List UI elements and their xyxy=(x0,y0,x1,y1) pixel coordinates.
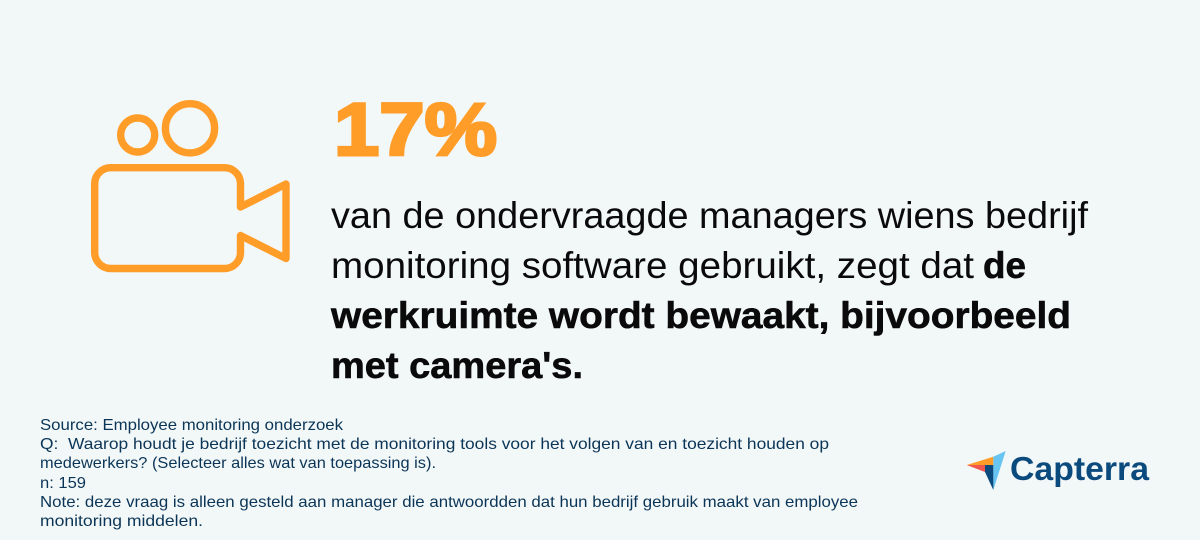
statement text: van de ondervraagde managers wiens bedrijf xyxy=(331,195,1089,236)
statement text: werkruimte wordt bewaakt, bijvoorbeeld xyxy=(330,295,1071,336)
source note: monitoring middelen. xyxy=(40,513,203,530)
statement text: monitoring software gebruikt, zegt dat xyxy=(331,245,975,286)
logo mark xyxy=(967,451,1006,490)
icon: video camera xyxy=(95,104,286,268)
source note: Q: Waarop houdt je bedrijf toezicht met de monitoring tools voor het volgen van en toezicht houden op xyxy=(40,436,829,453)
source note xyxy=(40,417,858,530)
source note: medewerkers? (Selecteer alles wat van toepassing is). xyxy=(40,455,436,472)
statement text: met camera's. xyxy=(331,345,583,386)
source note: Note: deze vraag is alleen gesteld aan manager die antwoordden dat hun bedrijf gebruik maakt van employee xyxy=(40,494,858,511)
source note: n: 159 xyxy=(40,475,86,492)
statement text xyxy=(330,195,1089,386)
statement text: de xyxy=(983,245,1026,286)
logo wordmark: Capterra xyxy=(1010,450,1150,487)
source note: Source: Employee monitoring onderzoek xyxy=(40,417,344,434)
headline statistic: 17%: 17% xyxy=(334,88,497,171)
logo: Capterra xyxy=(967,450,1150,490)
